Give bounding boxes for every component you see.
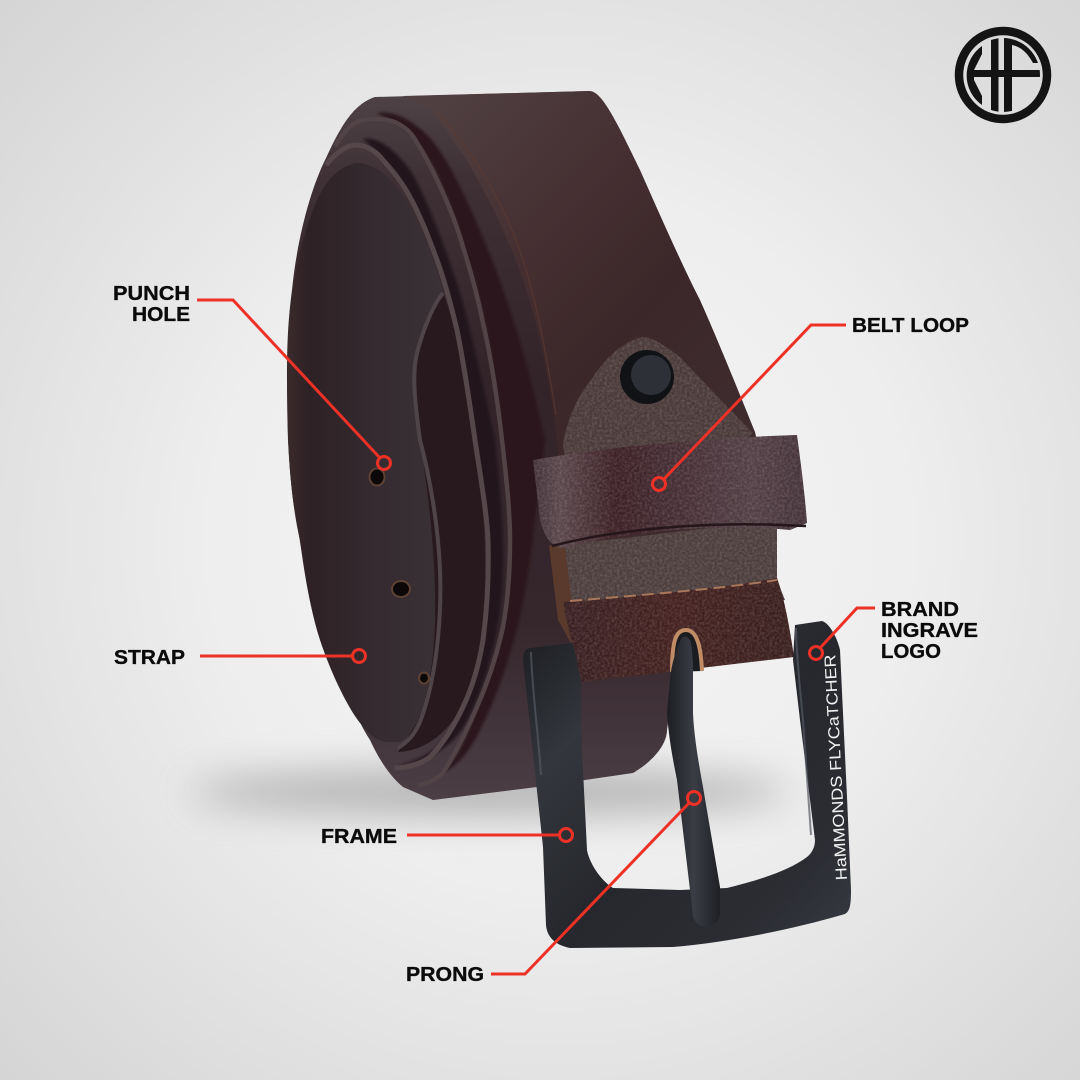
frayed strap end: [549, 545, 590, 680]
strap rim line: [436, 112, 556, 415]
callout: prong: PRONG: [406, 963, 484, 986]
strap inner face: [288, 163, 443, 742]
callout: frame: FRAME: [321, 825, 397, 848]
callout: punch hole: PUNCH: [113, 282, 190, 305]
floor shadow: [190, 770, 790, 814]
callout: prong: [406, 792, 700, 986]
belt keeper lower tab: [565, 520, 785, 620]
prong: [667, 636, 720, 927]
callout: brand ingrave logo: [810, 598, 978, 663]
callout: brand ingrave logo: BRAND: [881, 598, 959, 621]
callout: strap: [114, 646, 366, 669]
callout: frame: [321, 825, 572, 848]
callout: brand ingrave logo: INGRAVE: [881, 619, 978, 642]
innermost wrap ridge: [326, 145, 488, 768]
middle wrap ridge: [335, 119, 510, 785]
buckle tab leather: [563, 578, 794, 682]
callout: belt loop: BELT LOOP: [852, 314, 969, 337]
main strap band: [403, 91, 777, 625]
tongue edge highlight: [398, 293, 443, 748]
callout: punch hole: [113, 282, 390, 470]
coiled strap silhouette: [287, 91, 680, 800]
brand engraving on buckle: HaMMONDS FLYCaTCHER: [822, 654, 851, 881]
keeper bottom edge: [552, 524, 806, 546]
brand logo: [959, 31, 1047, 119]
callout: belt loop: [652, 314, 969, 490]
rivet: [620, 350, 674, 404]
buckle frame: [523, 621, 851, 948]
callout: punch hole: HOLE: [132, 303, 190, 326]
tongue shadow area: [398, 293, 485, 752]
belt illustration: [287, 91, 851, 948]
keeper: [533, 435, 807, 548]
dark gap outer wrap: [377, 113, 545, 782]
frame highlights: [531, 628, 811, 835]
punch holes: [370, 468, 429, 684]
dark gap middle wrap: [363, 139, 503, 765]
prong slot: [672, 630, 702, 672]
loop tab with rivet: [563, 337, 753, 480]
callout: strap: STRAP: [114, 646, 185, 669]
callout: brand ingrave logo: LOGO: [881, 640, 941, 663]
stitching: [570, 580, 777, 601]
